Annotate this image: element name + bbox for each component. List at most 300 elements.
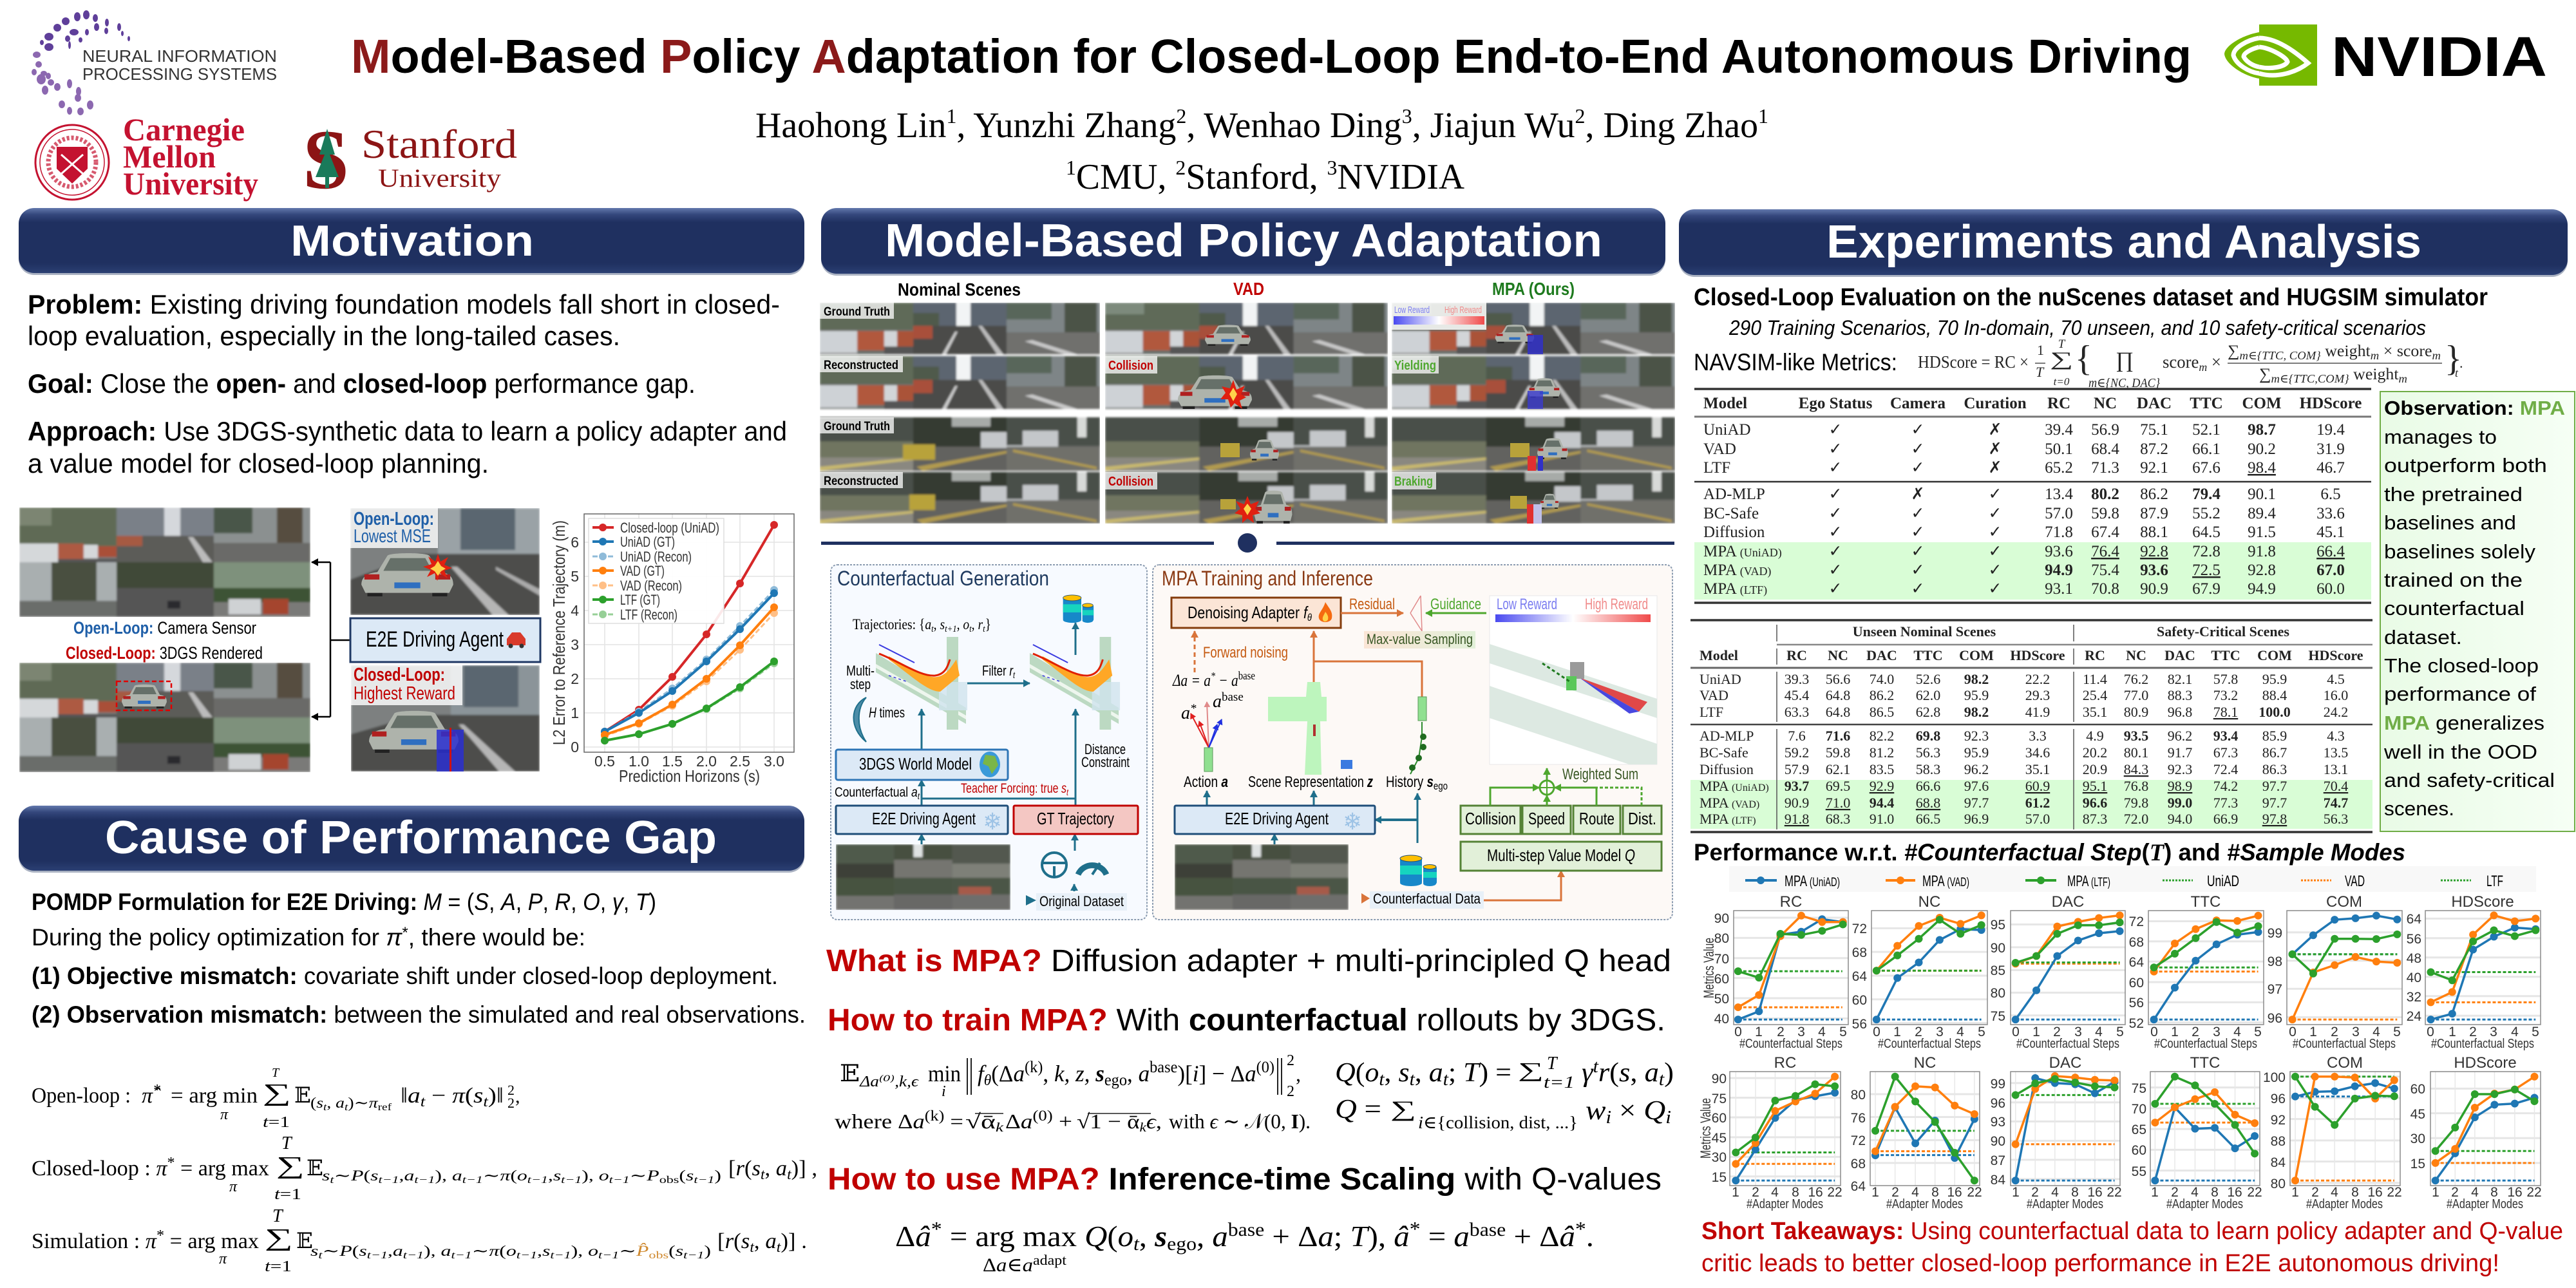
equation: simulation: s bbox=[676, 1243, 683, 1259]
image: closed-loop highest reward: Highest Reward bbox=[354, 683, 455, 704]
charts: performance vs adapter modes: RC bbox=[1774, 1054, 1796, 1072]
table: unseen nominal and safety-critical scenes: 98.2 bbox=[1964, 704, 1989, 720]
table: unseen nominal and safety-critical scenes: 16.0 bbox=[2324, 687, 2348, 703]
callout: observation: performance of bbox=[2384, 683, 2536, 705]
table: unseen nominal and safety-critical scenes: 64.8 bbox=[1826, 704, 1850, 720]
charts: performance vs counterfactual steps: 0 bbox=[2289, 1025, 2297, 1039]
callout: observation: manages to bbox=[2384, 426, 2497, 448]
image grid: nominal scenes bbox=[820, 303, 1100, 524]
panel: counterfactual generation: H times bbox=[869, 705, 905, 721]
table: closed-loop evaluation: 65.2 bbox=[2045, 459, 2073, 477]
equation: diffusion loss: 2 bbox=[1287, 1052, 1294, 1069]
table: unseen nominal and safety-critical scenes: NC bbox=[1828, 647, 1848, 663]
equation: diffusion loss bbox=[840, 1052, 1301, 1100]
charts: performance vs counterfactual steps: 80 bbox=[1714, 931, 1729, 946]
table: closed-loop evaluation: 67.4 bbox=[2091, 524, 2119, 541]
equation: diffusion loss: , bbox=[1296, 1063, 1301, 1086]
box: E2E driving agent: E2E Driving Agent bbox=[366, 627, 504, 652]
table: unseen nominal and safety-critical scenes: 90.9 bbox=[1785, 795, 1809, 811]
equation: closed-loop: t bbox=[787, 1166, 791, 1182]
equation: open-loop: 2 bbox=[507, 1095, 515, 1111]
table: closed-loop evaluation: 66.4 bbox=[2316, 543, 2345, 560]
equation: closed-loop: 𝔼 bbox=[307, 1157, 323, 1180]
image grid: nominal scenes: Reconstructed bbox=[824, 359, 898, 372]
equation: inference-time scaling: Δa∈a bbox=[983, 1255, 1032, 1276]
table: unseen nominal and safety-critical scenes: 86.7 bbox=[2262, 744, 2287, 761]
affiliations: NVIDIA bbox=[1337, 157, 1465, 197]
charts: performance vs adapter modes: 1 bbox=[1732, 1185, 1739, 1200]
table: unseen nominal and safety-critical scenes: 24.2 bbox=[2324, 704, 2348, 720]
image grid: MPA ours: High Reward bbox=[1444, 305, 1482, 316]
table: unseen nominal and safety-critical scenes: COM bbox=[1959, 647, 1994, 663]
table: unseen nominal and safety-critical scenes: 86.3 bbox=[2262, 761, 2287, 777]
equation: HDScore: m bbox=[2199, 361, 2207, 374]
table: unseen nominal and safety-critical scenes: 79.8 bbox=[2124, 795, 2148, 811]
table: unseen nominal and safety-critical scenes: 88.4 bbox=[2262, 687, 2287, 703]
table: unseen nominal and safety-critical scenes: 95.1 bbox=[2083, 778, 2107, 794]
equation: simulation: Simulation : π bbox=[32, 1229, 156, 1253]
equation: forward noising: + bbox=[1053, 1110, 1072, 1133]
equation: simulation: t bbox=[750, 1239, 755, 1255]
chart: L2 error vs prediction horizons: 6 bbox=[571, 534, 579, 551]
charts: performance vs counterfactual steps: RC bbox=[1780, 893, 1802, 911]
charts: performance vs counterfactual steps: 1 bbox=[1755, 1025, 1763, 1039]
equation: simulation: 𝔼 bbox=[296, 1229, 313, 1253]
table: unseen nominal and safety-critical scenes: 56.3 bbox=[1916, 744, 1940, 761]
table: unseen nominal and safety-critical scenes: 95.9 bbox=[1964, 687, 1989, 703]
equation: closed-loop: a bbox=[404, 1168, 414, 1184]
heading: model-based policy adaptation bbox=[821, 208, 1665, 276]
affiliations: 3 bbox=[1327, 156, 1337, 179]
equation: simulation bbox=[32, 1206, 807, 1275]
table: unseen nominal and safety-critical scenes: 95.9 bbox=[1964, 744, 1989, 761]
charts: performance vs counterfactual steps: 50 bbox=[1714, 992, 1729, 1007]
arrow: residual: Residual bbox=[1349, 596, 1395, 613]
charts: performance vs adapter modes: 65 bbox=[2132, 1122, 2146, 1137]
chart: L2 error vs prediction horizons: 1.5 bbox=[662, 753, 683, 770]
equation: closed-loop: [r(s bbox=[728, 1157, 761, 1180]
charts: performance vs adapter modes: 2 bbox=[2451, 1185, 2459, 1200]
panel: counterfactual generation: Distance bbox=[1084, 741, 1126, 757]
icon: database bbox=[1400, 855, 1437, 886]
chart legend: MPA (VAD) bbox=[1922, 873, 1969, 890]
table: closed-loop evaluation: Model bbox=[1703, 395, 1747, 412]
table: closed-loop evaluation: ✓ bbox=[1829, 562, 1842, 579]
equation: simulation: π bbox=[219, 1251, 227, 1267]
table: unseen nominal and safety-critical scenes: 4.3 bbox=[2327, 728, 2345, 744]
table: closed-loop evaluation: 71.8 bbox=[2045, 524, 2073, 541]
arrow: agent to sensor images bbox=[312, 562, 350, 717]
equation: Q value: t bbox=[1659, 1070, 1665, 1090]
charts: performance vs adapter modes bbox=[1698, 1054, 2542, 1211]
table: closed-loop evaluation: 93.6 bbox=[2045, 543, 2073, 560]
table: unseen nominal and safety-critical scenes: 74.0 bbox=[1870, 671, 1894, 687]
table: closed-loop evaluation: ✓ bbox=[1911, 580, 1924, 598]
equation: simulation: T bbox=[272, 1206, 284, 1226]
equation: open-loop: − bbox=[425, 1084, 452, 1108]
table: closed-loop evaluation: ✓ bbox=[1911, 440, 1924, 458]
equation: simulation: t−1 bbox=[403, 1250, 424, 1261]
table: unseen nominal and safety-critical scenes: HDScore bbox=[2308, 647, 2363, 663]
equation: HDScore: × bbox=[2207, 352, 2221, 372]
equation: simulation: t−1 bbox=[683, 1250, 704, 1261]
equation: open-loop: 2 bbox=[507, 1082, 515, 1098]
charts: performance vs adapter modes: 22 bbox=[2387, 1185, 2402, 1200]
charts: performance vs adapter modes: 16 bbox=[2087, 1185, 2103, 1200]
equation: Q value: γ bbox=[1582, 1058, 1594, 1088]
panel: model-based policy adaptation bbox=[820, 208, 1675, 1276]
boxes: value heads: Collision bbox=[1465, 809, 1516, 828]
table: unseen nominal and safety-critical scenes: 52.6 bbox=[1916, 671, 1940, 687]
equation: open-loop: π bbox=[220, 1106, 229, 1123]
table: closed-loop evaluation: 98.4 bbox=[2248, 459, 2276, 477]
table: closed-loop evaluation: 46.7 bbox=[2316, 459, 2345, 477]
equation: simulation: P̂ bbox=[636, 1242, 649, 1259]
equation: HDScore: ∑ bbox=[2259, 366, 2271, 383]
table: unseen nominal and safety-critical scenes: 41.9 bbox=[2025, 704, 2050, 720]
equation: diffusion loss: (k) bbox=[1025, 1059, 1043, 1076]
charts: performance vs adapter modes: 4 bbox=[2471, 1185, 2479, 1200]
equation: diffusion loss: (Δ bbox=[991, 1061, 1013, 1086]
equation: simulation: s bbox=[310, 1243, 318, 1259]
equation: Q value: t bbox=[1379, 1070, 1385, 1090]
table: closed-loop evaluation: 31.9 bbox=[2316, 440, 2345, 458]
charts: performance vs adapter modes: 90 bbox=[1712, 1072, 1727, 1086]
table: closed-loop evaluation: ✗ bbox=[1989, 421, 2002, 439]
equation: inference-time scaling: = arg max bbox=[942, 1220, 1084, 1253]
charts: performance vs adapter modes: 90 bbox=[1991, 1134, 2005, 1149]
chart legend: VAD (GT) bbox=[620, 563, 665, 579]
charts: performance vs counterfactual steps: TTC bbox=[2191, 893, 2221, 911]
panel: MPA training and inference: * bbox=[1211, 670, 1215, 682]
text: approach: Approach: Use 3DGS-synthetic data to learn a policy adapter and bbox=[28, 416, 787, 446]
chart: L2 error vs prediction horizons: 0 bbox=[571, 739, 579, 755]
logo: Stanford University bbox=[303, 112, 517, 207]
table: closed-loop evaluation: 6.5 bbox=[2320, 486, 2341, 503]
authors: , Wenhao Ding bbox=[1186, 106, 1402, 146]
panel: MPA training and inference bbox=[1153, 565, 1672, 920]
text: short takeaways: Short Takeaways: Using counterfactual data to learn policy adapter and Q-value bbox=[1701, 1218, 2563, 1245]
table: closed-loop evaluation: 94.9 bbox=[2248, 580, 2276, 598]
chart: L2 error vs prediction horizons: 3 bbox=[571, 636, 579, 653]
table: closed-loop evaluation: ✓ bbox=[1829, 580, 1842, 598]
charts: performance vs adapter modes: 68 bbox=[1851, 1157, 1866, 1171]
authors: 3 bbox=[1402, 104, 1412, 128]
charts: performance vs adapter modes: 80 bbox=[1851, 1088, 1866, 1103]
charts: performance vs counterfactual steps: 5 bbox=[2532, 1025, 2539, 1039]
equation: simulation: P(s bbox=[339, 1243, 365, 1259]
text: approach bbox=[28, 416, 787, 478]
equation: weighted Q bbox=[1335, 1095, 1671, 1132]
text: objective mismatch: (1) Objective mismatch: covariate shift under closed-loop deployment. bbox=[32, 963, 778, 989]
heading: motivation: Motivation bbox=[290, 216, 534, 265]
panel title: MPA Training and Inference bbox=[1162, 567, 1373, 590]
image grid: nominal scenes: Reconstructed bbox=[824, 475, 898, 488]
equation: closed-loop: t−1 bbox=[694, 1175, 714, 1186]
box: value model: Multi-step Value Model Q bbox=[1487, 846, 1635, 865]
charts: performance vs adapter modes: 1 bbox=[2432, 1185, 2439, 1200]
table: unseen nominal and safety-critical scenes: 93.5 bbox=[2124, 728, 2148, 744]
table: unseen nominal and safety-critical scenes: Unseen Nominal Scenes bbox=[1853, 623, 1996, 639]
equation: closed-loop: , bbox=[765, 1157, 776, 1180]
table: unseen nominal and safety-critical scenes: 29.3 bbox=[2025, 687, 2050, 703]
logo: NVIDIA: NVIDIA bbox=[2331, 26, 2547, 88]
table: closed-loop evaluation: Diffusion bbox=[1703, 524, 1765, 541]
text: trajectories: s bbox=[940, 616, 945, 632]
chart: L2 error vs prediction horizons: 3.0 bbox=[764, 753, 784, 770]
heading: cause of performance gap bbox=[19, 806, 804, 873]
equation: forward noising: where Δ a bbox=[835, 1110, 923, 1133]
image: closed-loop highest reward bbox=[351, 665, 540, 772]
equation: forward noising: (0) bbox=[1033, 1108, 1053, 1124]
charts: performance vs counterfactual steps: 24 bbox=[2407, 1009, 2421, 1024]
panel: MPA training and inference: Action a bbox=[1184, 773, 1228, 791]
table: closed-loop evaluation: 57.0 bbox=[2045, 505, 2073, 522]
charts: performance vs adapter modes: 16 bbox=[1947, 1185, 1962, 1200]
equation: diffusion loss: θ bbox=[984, 1072, 991, 1089]
charts: performance vs counterfactual steps: DAC bbox=[2052, 893, 2084, 911]
charts: performance vs adapter modes: TTC bbox=[2190, 1054, 2220, 1072]
equation: simulation: t−1 bbox=[598, 1250, 619, 1261]
charts: performance vs adapter modes: 16 bbox=[2507, 1185, 2523, 1200]
panel: counterfactual generation: Teacher Forcing: true s bbox=[961, 781, 1088, 796]
charts: performance vs counterfactual steps: 64 bbox=[2129, 955, 2144, 970]
table: unseen nominal and safety-critical scenes: 71.6 bbox=[1826, 728, 1850, 744]
charts: performance vs counterfactual steps: HDScore bbox=[2451, 893, 2514, 911]
chart: L2 error vs prediction horizons: 2.0 bbox=[696, 753, 717, 770]
box: denoising adapter: θ bbox=[1307, 612, 1312, 623]
image grid: nominal scenes: Ground Truth bbox=[824, 420, 890, 433]
text: policy optimization: During the policy optimization for π bbox=[32, 924, 402, 951]
boxes: value heads bbox=[1461, 806, 1662, 834]
charts: performance vs adapter modes: 16 bbox=[2367, 1185, 2383, 1200]
diagram: weighted sum: Weighted Sum bbox=[1562, 766, 1638, 783]
panel: counterfactual generation: t bbox=[1013, 670, 1016, 680]
table: unseen nominal and safety-critical scenes: 59.2 bbox=[1785, 744, 1809, 761]
table: closed-loop evaluation: 93.6 bbox=[2140, 562, 2168, 579]
image: closed-loop highest reward: Closed-Loop: bbox=[354, 665, 445, 685]
table: unseen nominal and safety-critical scenes: 87.3 bbox=[2083, 811, 2107, 827]
equation: Q value: r bbox=[1598, 1058, 1610, 1088]
equation: HDScore: score bbox=[2163, 352, 2199, 372]
table: closed-loop evaluation: 92.8 bbox=[2248, 562, 2276, 579]
charts: performance vs adapter modes: 2 bbox=[1752, 1185, 1759, 1200]
charts: performance vs adapter modes: 2 bbox=[2311, 1185, 2319, 1200]
equation: forward noising: √ᾱ bbox=[965, 1110, 987, 1133]
chart: L2 error vs prediction horizons: 5 bbox=[571, 568, 579, 585]
charts: performance vs adapter modes: 2 bbox=[1891, 1185, 1899, 1200]
charts: performance vs counterfactual steps: 4 bbox=[2233, 1025, 2241, 1039]
equation: inference-time scaling: a; T), â bbox=[1318, 1220, 1408, 1253]
equation: HDScore: T bbox=[2036, 364, 2045, 380]
equation: inference-time scaling: ego bbox=[1167, 1233, 1197, 1255]
table: unseen nominal and safety-critical scenes: 96.2 bbox=[1964, 761, 1989, 777]
charts: performance vs counterfactual steps: 2 bbox=[2331, 1025, 2338, 1039]
table: closed-loop evaluation: 66.1 bbox=[2192, 440, 2221, 458]
charts: performance vs adapter modes: 80 bbox=[2271, 1177, 2286, 1191]
equation: closed-loop: a bbox=[452, 1168, 462, 1184]
diagram: history bbox=[1409, 697, 1426, 774]
equation: inference-time scaling: a bbox=[1454, 1220, 1470, 1253]
equation: closed-loop: t bbox=[761, 1166, 765, 1182]
equation: open-loop: )‖ bbox=[488, 1084, 504, 1108]
table: unseen nominal and safety-critical scenes: 62.0 bbox=[1916, 687, 1940, 703]
equation: simulation: ∼ bbox=[323, 1243, 339, 1259]
charts: performance vs adapter modes: 75 bbox=[2132, 1081, 2146, 1096]
equation: HDScore: m∈{NC, DAC} bbox=[2088, 376, 2160, 390]
charts: performance vs counterfactual steps: 2 bbox=[1777, 1025, 1785, 1039]
diagram: action fan: * bbox=[1190, 702, 1197, 715]
equation: HDScore: ∑ bbox=[2050, 348, 2073, 370]
charts: performance vs counterfactual steps: 3 bbox=[1936, 1025, 1944, 1039]
logo: Carnegie Mellon University: Carnegie bbox=[123, 111, 245, 147]
equation: simulation: , bbox=[537, 1243, 542, 1259]
table: unseen nominal and safety-critical scenes: 91.7 bbox=[2168, 744, 2192, 761]
equation: Q value: s bbox=[1399, 1058, 1410, 1088]
table: unseen nominal and safety-critical scenes: 97.6 bbox=[1964, 778, 1989, 794]
equation: closed-loop: t−1 bbox=[527, 1175, 548, 1186]
boxes: value heads: Speed bbox=[1528, 809, 1565, 828]
box: denoising adapter: Denoising Adapter f bbox=[1188, 603, 1324, 622]
callout: observation: Observation: MPA bbox=[2384, 397, 2565, 419]
charts: performance vs adapter modes: 16 bbox=[1808, 1185, 1823, 1200]
equation: diffusion loss: , bbox=[1043, 1061, 1054, 1086]
table: closed-loop evaluation: 91.5 bbox=[2248, 524, 2276, 541]
charts: performance vs adapter modes: 60 bbox=[2410, 1082, 2425, 1097]
charts: performance vs counterfactual steps: 75 bbox=[1991, 1009, 2005, 1024]
equation: open-loop: t=1 bbox=[263, 1114, 290, 1131]
equation: open-loop: Open-loop : bbox=[32, 1084, 131, 1108]
equation: closed-loop: = arg max bbox=[175, 1157, 269, 1180]
charts: performance vs adapter modes: 8 bbox=[1792, 1185, 1799, 1200]
table: unseen nominal and safety-critical scenes: 25.4 bbox=[2083, 687, 2107, 703]
equation: open-loop: ‖a bbox=[401, 1084, 419, 1108]
equation: simulation: o bbox=[588, 1243, 598, 1259]
charts: performance vs adapter modes: 2 bbox=[2031, 1185, 2039, 1200]
equation: diffusion loss: 2 bbox=[1287, 1083, 1294, 1100]
equation: inference-time scaling: * bbox=[931, 1217, 942, 1240]
panel: cause of performance gap bbox=[19, 806, 817, 1275]
charts: performance vs counterfactual steps: 0 bbox=[1734, 1025, 1742, 1039]
equation: Q value: , bbox=[1415, 1058, 1429, 1088]
charts: performance vs counterfactual steps: 40 bbox=[1714, 1012, 1729, 1027]
callout: observation: baselines and bbox=[2384, 511, 2516, 534]
table: unseen nominal and safety-critical scenes: TTC bbox=[1913, 647, 1943, 663]
text: trajectories: t+1 bbox=[945, 624, 957, 634]
callout: observation: well in the OOD bbox=[2383, 741, 2537, 763]
equation: open-loop bbox=[32, 1066, 520, 1131]
table: closed-loop evaluation: 91.8 bbox=[2248, 543, 2276, 560]
charts: performance vs adapter modes: 100 bbox=[2263, 1070, 2286, 1085]
affiliations: CMU, bbox=[1076, 157, 1175, 197]
equation: open-loop: 𝔼 bbox=[294, 1084, 311, 1108]
image: camera views bbox=[836, 844, 1010, 910]
equation: HDScore: 1 bbox=[2037, 342, 2044, 358]
charts: performance vs counterfactual steps: 64 bbox=[2407, 912, 2421, 927]
text: policy optimization: , there would be: bbox=[408, 924, 585, 951]
box: GT trajectory bbox=[1014, 806, 1138, 834]
chart: L2 error vs prediction horizons: 2.5 bbox=[730, 753, 750, 770]
table: unseen nominal and safety-critical scenes: 59.8 bbox=[1826, 744, 1850, 761]
equation: open-loop: t bbox=[483, 1094, 489, 1110]
column header: nominal scenes: Nominal Scenes bbox=[898, 279, 1021, 299]
callout: observation: baselines solely bbox=[2384, 540, 2536, 563]
equation: forward noising: k bbox=[1140, 1121, 1147, 1135]
table: closed-loop evaluation: ✓ bbox=[1911, 421, 1924, 439]
table: closed-loop evaluation: ✓ bbox=[1911, 543, 1924, 560]
diagram: weighted sum bbox=[1490, 766, 1642, 806]
label: counterfactual data: Counterfactual Data bbox=[1373, 891, 1481, 907]
equation: HDScore: m bbox=[2371, 349, 2379, 362]
subheading: performance: Performance w.r.t. #Counterfactual Step(T) and #Sample Modes bbox=[1694, 839, 2405, 866]
text: how to use MPA: How to use MPA? Inference-time Scaling with Q-values bbox=[828, 1162, 1662, 1197]
equation: closed-loop: t−1 bbox=[609, 1175, 630, 1186]
charts: performance vs counterfactual steps: 40 bbox=[2407, 971, 2421, 985]
diagram: action fan: a bbox=[1181, 703, 1190, 723]
equation: closed-loop: P bbox=[646, 1168, 659, 1184]
equation: closed-loop: ) bbox=[714, 1168, 721, 1184]
image grid: VAD: Collision bbox=[1108, 475, 1153, 489]
equation: inference-time scaling: â bbox=[1559, 1220, 1575, 1253]
text: trajectories: t bbox=[983, 624, 985, 634]
table: closed-loop evaluation: 70.8 bbox=[2091, 580, 2119, 598]
equation: open-loop: t bbox=[323, 1102, 327, 1113]
equation: closed-loop: * bbox=[167, 1155, 175, 1171]
panel: MPA training and inference: History s bbox=[1386, 773, 1435, 791]
table: unseen nominal and safety-critical scenes: 92.3 bbox=[1964, 728, 1989, 744]
callout: observation: scenes. bbox=[2384, 797, 2454, 820]
affiliations: Stanford, bbox=[1186, 157, 1327, 197]
equation: HDScore: t=0 bbox=[2054, 375, 2070, 388]
table: unseen nominal and safety-critical scenes: LTF bbox=[1700, 704, 1723, 720]
table: unseen nominal and safety-critical scenes: 96.8 bbox=[2168, 704, 2192, 720]
logo: NVIDIA bbox=[2224, 24, 2547, 88]
table: unseen nominal and safety-critical scenes: 86.5 bbox=[1870, 704, 1894, 720]
charts: performance vs counterfactual steps: 5 bbox=[1978, 1025, 1985, 1039]
charts: performance vs adapter modes: 1 bbox=[2291, 1185, 2299, 1200]
arrows bbox=[1195, 631, 1561, 904]
equation: inference-time scaling: * bbox=[1410, 1217, 1421, 1240]
equation: inference-time scaling: + Δ bbox=[1506, 1220, 1559, 1253]
chart legend: Closed-loop (UniAD) bbox=[620, 520, 719, 536]
charts: performance vs counterfactual steps: 48 bbox=[2407, 951, 2421, 966]
image: open-loop camera sensor mosaic bbox=[19, 507, 310, 617]
charts: performance vs adapter modes: 60 bbox=[1712, 1111, 1727, 1126]
icon: database bbox=[1063, 595, 1094, 623]
charts: performance vs adapter modes: 64 bbox=[1851, 1179, 1866, 1194]
equation: weighted Q: w bbox=[1586, 1096, 1605, 1126]
equation: inference-time scaling: + Δ bbox=[1264, 1220, 1318, 1253]
table: closed-loop evaluation: MPA (UniAD) bbox=[1703, 543, 1782, 560]
table: unseen nominal and safety-critical scenes: 13.1 bbox=[2324, 761, 2348, 777]
equation: forward noising: with ϵ ∼ 𝒩(0, I). bbox=[1169, 1110, 1311, 1133]
charts: performance vs counterfactual steps: 72 bbox=[2129, 914, 2144, 929]
text: trajectories: r bbox=[978, 616, 983, 632]
table: unseen nominal and safety-critical scenes: 91.8 bbox=[1785, 811, 1809, 827]
charts: performance vs adapter modes: 15 bbox=[2410, 1157, 2425, 1171]
equation: Q value: a bbox=[1429, 1058, 1443, 1088]
table: unseen nominal and safety-critical scenes: 88.3 bbox=[2168, 687, 2192, 703]
table: closed-loop evaluation: 75.1 bbox=[2140, 421, 2168, 439]
image: open-loop lowest MSE bbox=[350, 508, 540, 615]
charts: performance vs counterfactual steps: 68 bbox=[2129, 935, 2144, 950]
chart legend: UniAD bbox=[2207, 873, 2239, 890]
chart: L2 error vs prediction horizons: 1 bbox=[571, 705, 579, 721]
box: E2E driving agent bbox=[350, 618, 540, 662]
table: unseen nominal and safety-critical scenes: 71.0 bbox=[1826, 795, 1850, 811]
table: closed-loop evaluation: ✓ bbox=[1829, 486, 1842, 503]
equation: closed-loop: T bbox=[281, 1133, 293, 1153]
